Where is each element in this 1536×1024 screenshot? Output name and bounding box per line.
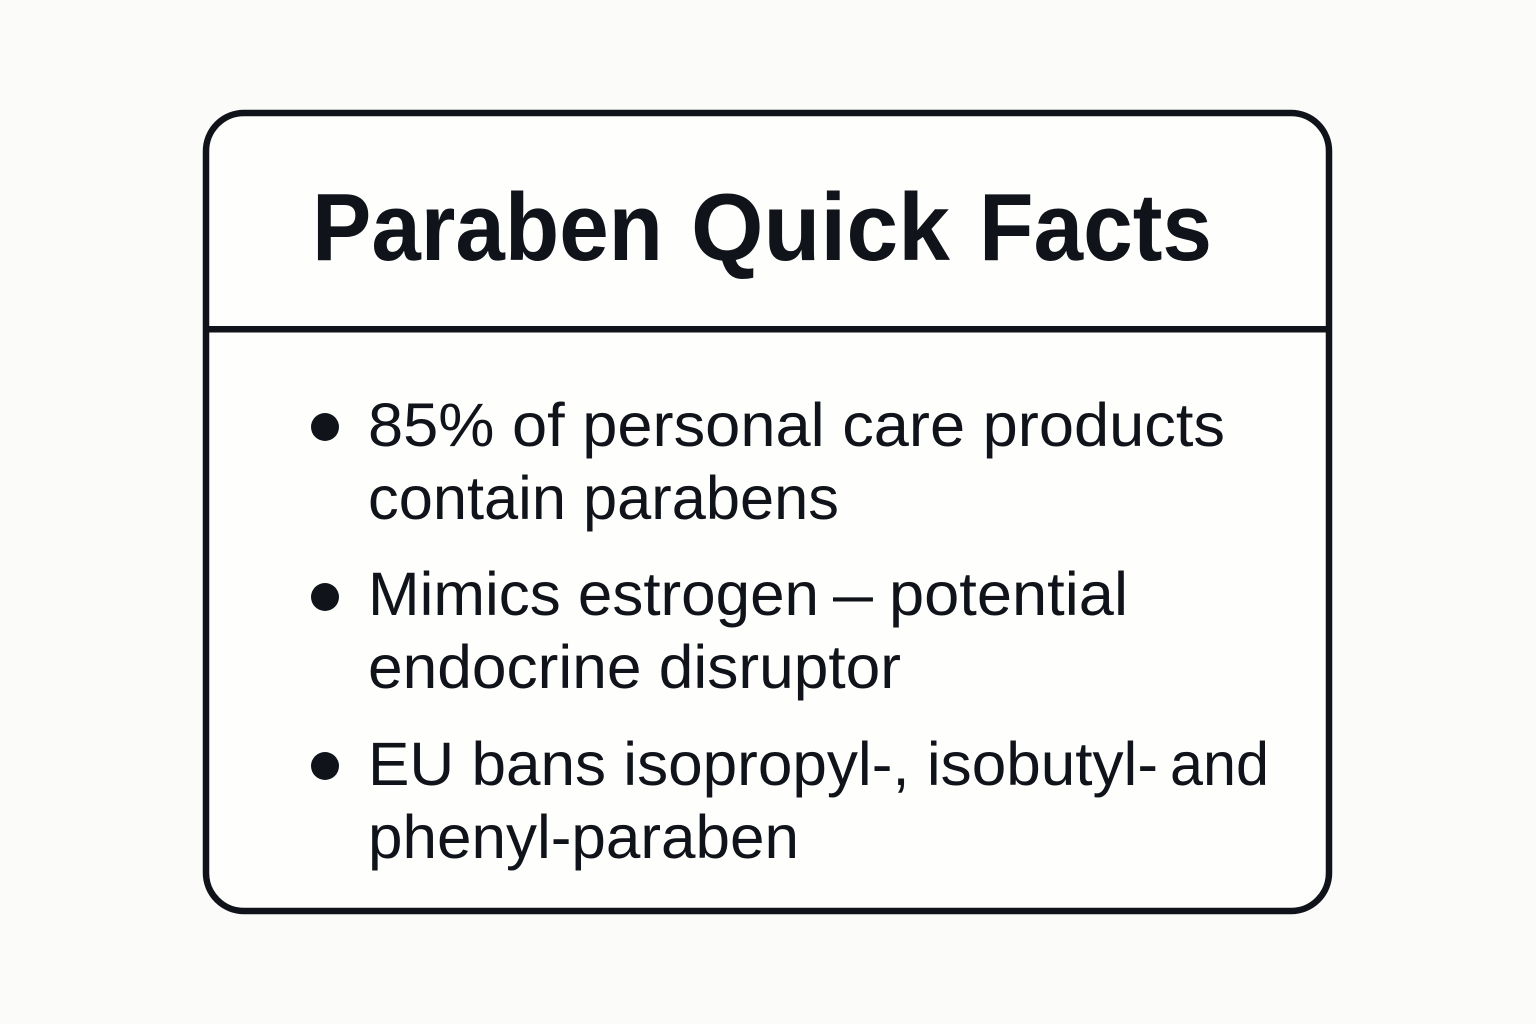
card panel: [206, 113, 1329, 911]
fact 3: and: [1170, 730, 1269, 798]
title: [312, 174, 1212, 281]
title: Quick: [691, 174, 951, 281]
fact 2: endocrine disruptor: [368, 633, 901, 701]
header divider: [206, 326, 1329, 332]
fact 2: [311, 560, 1128, 701]
fact 3: phenyl-paraben: [368, 803, 799, 871]
fact 3: EU bans isopropyl-, isobutyl-: [368, 730, 1158, 798]
fact 1: 85% of personal care products: [368, 391, 1225, 459]
fact 3: [311, 730, 1269, 871]
fact 2: Mimics estrogen: [368, 560, 819, 628]
fact 1: [311, 391, 1225, 532]
fact 2: –: [833, 560, 873, 628]
fact 2: potential: [889, 560, 1128, 628]
fact 1: contain parabens: [368, 464, 839, 532]
title: Facts: [979, 174, 1212, 281]
title: Paraben: [312, 174, 663, 281]
